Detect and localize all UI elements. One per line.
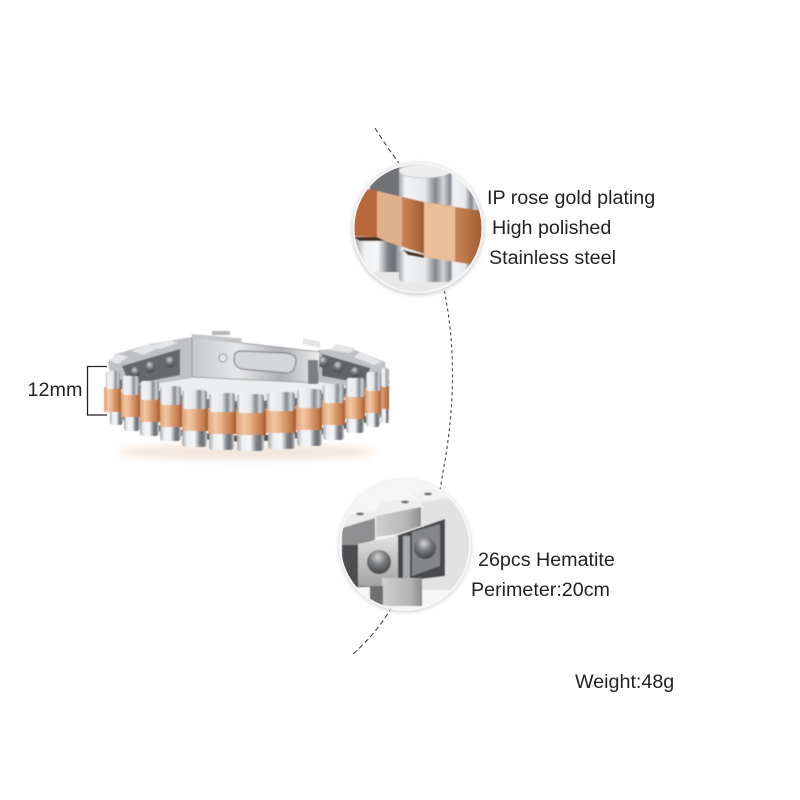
rose gold band [104,384,389,435]
circle rim: detail bottom [340,480,470,610]
label: perimeter: Perimeter:20cm [471,579,610,601]
bottom silver links [110,408,389,451]
bracelet photo [104,331,389,460]
dashed leader line: top [375,128,399,163]
silver links upper [370,164,480,214]
centre top link [378,503,412,514]
dimension label: 12mm: 12mm [28,379,82,401]
back strip: left [108,337,192,388]
hematite ball: right [414,537,436,559]
inner white opening [131,369,361,401]
label: plating: IP rose gold plating [487,187,655,209]
circle shadow: detail bottom [339,480,471,612]
left top plate [344,512,374,526]
gap shadow: lower row [112,411,388,439]
left lower shadow [370,586,383,608]
clasp [192,331,320,384]
detail circle: rose gold links [354,164,482,292]
label: hematite count: 26pcs Hematite [478,549,615,571]
hematite ball: left [367,550,391,574]
circle rim: detail top [354,164,482,292]
silver links lower [355,238,480,282]
dimension bracket [88,366,107,415]
label: polish: High polished [492,217,611,239]
left top plate face [342,518,375,550]
window highlight [403,536,410,580]
magnet panel: right [322,354,370,384]
gap shadow: upper row [108,378,388,406]
top right cap [422,492,448,502]
dark window: left [342,544,370,588]
back strip: right [318,348,388,388]
infographic canvas [29,128,673,692]
label: material: Stainless steel [489,247,616,269]
reflection under bracelet [116,444,376,460]
left link plate [358,536,398,588]
window inner plate [412,524,440,576]
detail circle: hematite links [340,478,470,612]
dark window: right [396,519,445,582]
label: weight: Weight:48g [575,671,674,693]
dashed leader line: between circles [440,285,452,490]
cap dots [356,492,432,516]
dashed leader line: bottom [352,607,392,655]
circle shadow: detail top [352,163,484,295]
lower link [382,578,422,606]
back link tops [108,338,382,365]
magnet panel: left [122,349,180,385]
rose gold plates [350,188,482,266]
top silver links [106,368,389,413]
centre link face [376,507,421,537]
right plate [422,490,470,590]
magnets [130,356,360,377]
